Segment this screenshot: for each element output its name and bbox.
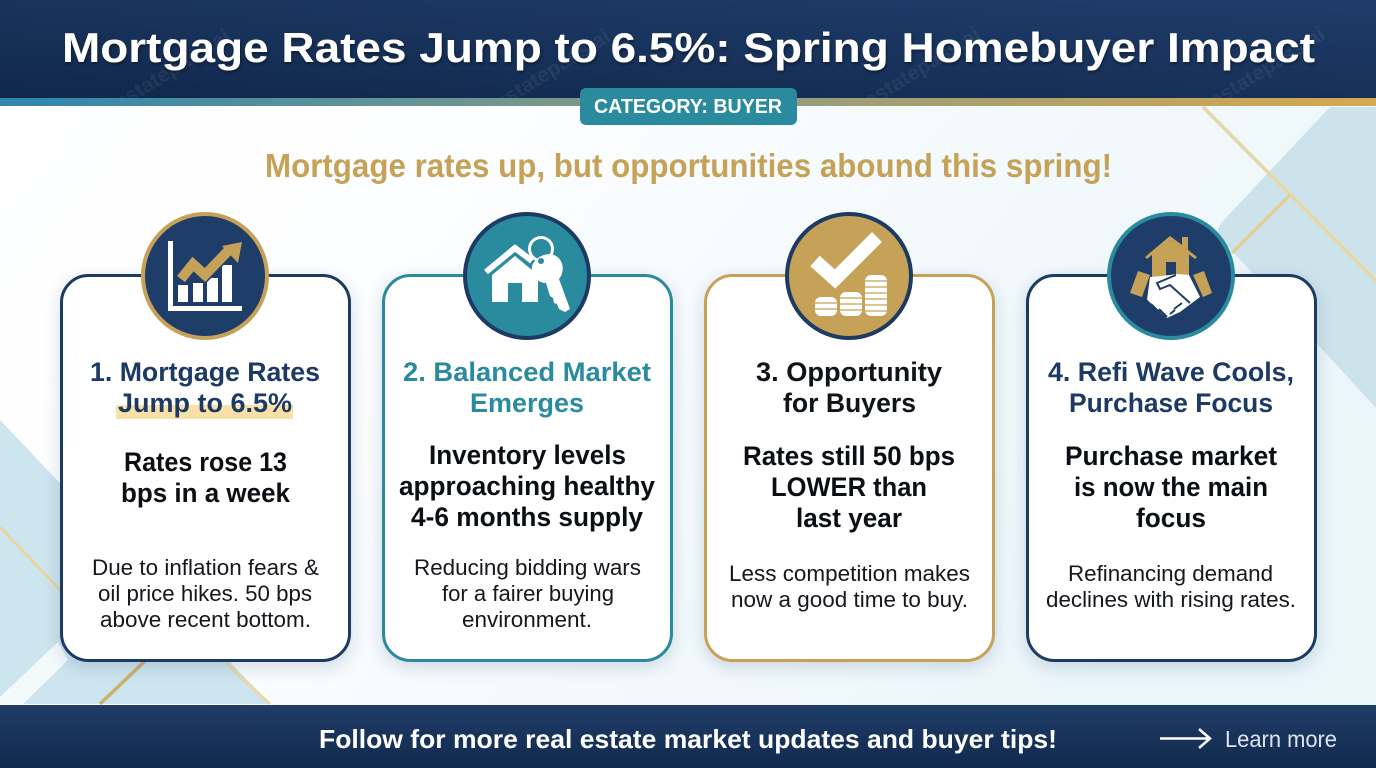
heading: 4. Refi Wave Cools, xyxy=(1048,357,1294,387)
detail text xyxy=(1046,561,1296,612)
detail text: oil price hikes. 50 bps xyxy=(98,581,312,606)
key fact xyxy=(121,447,291,508)
heading: Jump to 6.5% xyxy=(118,388,292,418)
key fact xyxy=(399,440,655,532)
key fact: last year xyxy=(796,503,902,533)
key fact: 4-6 months supply xyxy=(411,502,643,532)
key fact: is now the main xyxy=(1074,472,1268,502)
heading: Emerges xyxy=(470,388,584,418)
detail text: now a good time to buy. xyxy=(731,587,968,612)
detail text: Refinancing demand xyxy=(1068,561,1273,586)
key fact: approaching healthy xyxy=(399,471,655,501)
header gradient strip xyxy=(0,98,1376,106)
title: Mortgage Rates Jump to 6.5%: Spring Homebuyer Impact xyxy=(62,24,1315,71)
detail text: above recent bottom. xyxy=(100,607,311,632)
subtitle: Mortgage rates up, but opportunities abound this spring! xyxy=(265,147,1112,184)
icon: check and coins xyxy=(787,214,911,338)
detail text xyxy=(729,561,970,612)
heading xyxy=(403,357,651,418)
detail text: Less competition makes xyxy=(729,561,970,586)
detail text xyxy=(414,555,641,632)
key fact: Purchase market xyxy=(1065,441,1277,471)
arrow: learn more xyxy=(1160,729,1210,748)
header band: estatepass.ai xyxy=(860,23,985,112)
key fact: Rates rose 13 xyxy=(124,447,287,477)
detail text: Reducing bidding wars xyxy=(414,555,641,580)
header band: estatepass.ai xyxy=(110,25,235,114)
background with geometric shapes xyxy=(0,100,1376,710)
key fact xyxy=(1065,441,1277,533)
detail text: declines with rising rates. xyxy=(1046,587,1296,612)
detail text: for a fairer buying xyxy=(442,581,614,606)
footer band xyxy=(0,705,1376,768)
key fact: Rates still 50 bps xyxy=(743,441,955,471)
panel: card 2 balanced market xyxy=(384,214,672,660)
key fact: Inventory levels xyxy=(429,440,626,470)
icon: rising chart xyxy=(143,214,267,338)
panel: card 1 mortgage rates xyxy=(62,214,350,660)
heading xyxy=(90,357,320,419)
panel: card 4 refi wave xyxy=(1028,214,1316,660)
category badge xyxy=(580,88,797,125)
panel: card 3 opportunity xyxy=(706,214,994,660)
heading: 2. Balanced Market xyxy=(403,357,651,387)
heading: 1. Mortgage Rates xyxy=(90,357,320,387)
header band: estatepass.ai xyxy=(1205,23,1330,112)
detail text xyxy=(92,555,319,632)
heading xyxy=(1048,357,1294,418)
heading: 3. Opportunity xyxy=(756,357,942,387)
icon: house and handshake xyxy=(1109,214,1233,338)
key fact: focus xyxy=(1136,503,1206,533)
learn more link: Learn more xyxy=(1225,726,1337,752)
detail text: environment. xyxy=(462,607,592,632)
header band xyxy=(0,0,1376,114)
key fact: bps in a week xyxy=(121,478,291,508)
heading: Purchase Focus xyxy=(1069,388,1273,418)
category badge: CATEGORY: BUYER xyxy=(594,96,783,118)
key fact xyxy=(743,441,955,533)
icon: house and key xyxy=(465,214,589,338)
detail text: Due to inflation fears & xyxy=(92,555,319,580)
key fact: LOWER than xyxy=(771,472,927,502)
heading xyxy=(756,357,942,418)
header band: estatepass.ai xyxy=(490,25,615,114)
footer message: Follow for more real estate market updates and buyer tips! xyxy=(319,724,1057,754)
heading: for Buyers xyxy=(783,388,916,418)
